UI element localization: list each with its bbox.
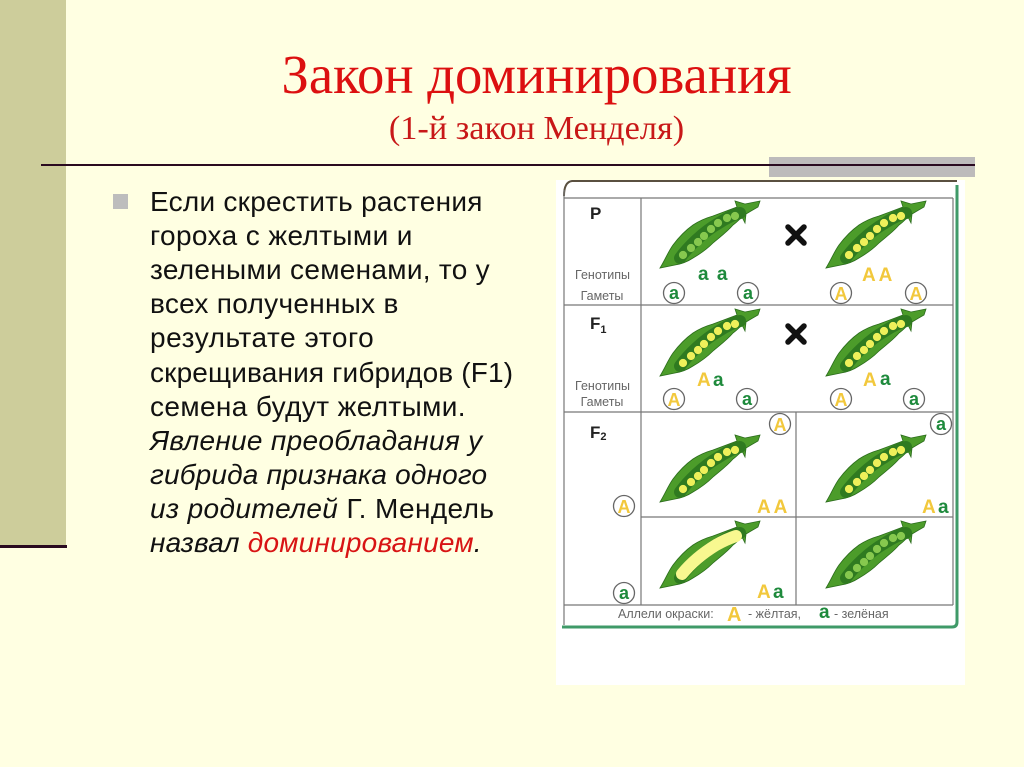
gamete letters: a bbox=[619, 583, 630, 603]
allele legend: a bbox=[819, 602, 830, 623]
body text: Если скрестить растения bbox=[150, 186, 483, 217]
body text: скрещивания гибридов (F1) bbox=[150, 357, 513, 388]
allele legend: - зелёная bbox=[834, 607, 889, 621]
genotype letters: a a bbox=[698, 264, 729, 285]
allele legend: - жёлтая, bbox=[748, 607, 801, 621]
gamete letters: A bbox=[618, 497, 630, 517]
body text: гибрида признака одного bbox=[150, 459, 487, 490]
gamete letters bbox=[618, 283, 947, 603]
body text: зелеными семенами, то у bbox=[150, 254, 490, 285]
gamete letters: A bbox=[668, 390, 680, 410]
body text: результате этого bbox=[150, 322, 374, 353]
gamete letters: A bbox=[910, 284, 922, 304]
row labels bbox=[575, 268, 630, 409]
genotype letters: A A bbox=[862, 265, 893, 286]
gamete letters: a bbox=[743, 283, 754, 303]
genotype letters bbox=[697, 264, 949, 603]
gamete letters: a bbox=[669, 283, 680, 303]
genotype letters: A bbox=[863, 370, 877, 391]
gamete letters: a bbox=[936, 414, 947, 434]
genotype letters: A bbox=[757, 582, 771, 603]
genotype letters: a bbox=[938, 497, 949, 518]
body text bbox=[148, 186, 513, 558]
grey accent bar bbox=[769, 157, 975, 177]
body text: из родителей Г. Мендель bbox=[150, 493, 494, 524]
allele legend: A bbox=[727, 604, 741, 626]
allele legend: Аллели окраски: bbox=[618, 607, 714, 621]
table grid bbox=[564, 181, 957, 625]
generation labels: 1 bbox=[600, 324, 607, 336]
gamete letters: A bbox=[774, 415, 786, 435]
gamete letters: a bbox=[742, 389, 753, 409]
generation labels bbox=[590, 204, 607, 443]
pea pods bbox=[660, 201, 926, 588]
subtitle: (1-й закон Менделя) bbox=[389, 108, 684, 146]
generation labels: F bbox=[590, 423, 600, 442]
generation labels: F bbox=[590, 314, 600, 333]
row labels: Гаметы bbox=[581, 395, 623, 409]
row labels: Генотипы bbox=[575, 268, 630, 282]
gamete letters: a bbox=[909, 389, 920, 409]
row labels: Генотипы bbox=[575, 379, 630, 393]
genotype letters: a bbox=[713, 370, 724, 391]
band bottom rule bbox=[0, 545, 67, 548]
row labels: Гаметы bbox=[581, 289, 623, 303]
title rule bbox=[41, 164, 975, 166]
title: Закон доминирования bbox=[281, 44, 792, 104]
generation labels: P bbox=[590, 204, 601, 223]
genotype letters: a bbox=[773, 582, 784, 603]
gamete letters: A bbox=[834, 284, 848, 304]
body text: всех полученных в bbox=[150, 288, 399, 319]
allele legend bbox=[618, 602, 889, 626]
bullet bbox=[113, 194, 128, 209]
genotype letters: a bbox=[880, 369, 891, 390]
body text: гороха с желтыми и bbox=[150, 220, 413, 251]
genotype letters: A A bbox=[757, 497, 788, 518]
body text: назвал доминированием. bbox=[150, 527, 482, 558]
body text: семена будут желтыми. bbox=[150, 391, 466, 422]
body text: Явление преобладания у bbox=[150, 425, 482, 456]
gamete letters: A bbox=[834, 390, 848, 410]
gamete circles bbox=[614, 282, 952, 604]
generation labels: 2 bbox=[600, 431, 607, 443]
green frame bbox=[562, 185, 957, 627]
cross signs bbox=[788, 227, 804, 342]
genotype letters: A bbox=[697, 370, 711, 391]
genotype letters: A bbox=[922, 497, 936, 518]
white image panel bbox=[556, 180, 965, 685]
left olive band bbox=[0, 0, 66, 545]
